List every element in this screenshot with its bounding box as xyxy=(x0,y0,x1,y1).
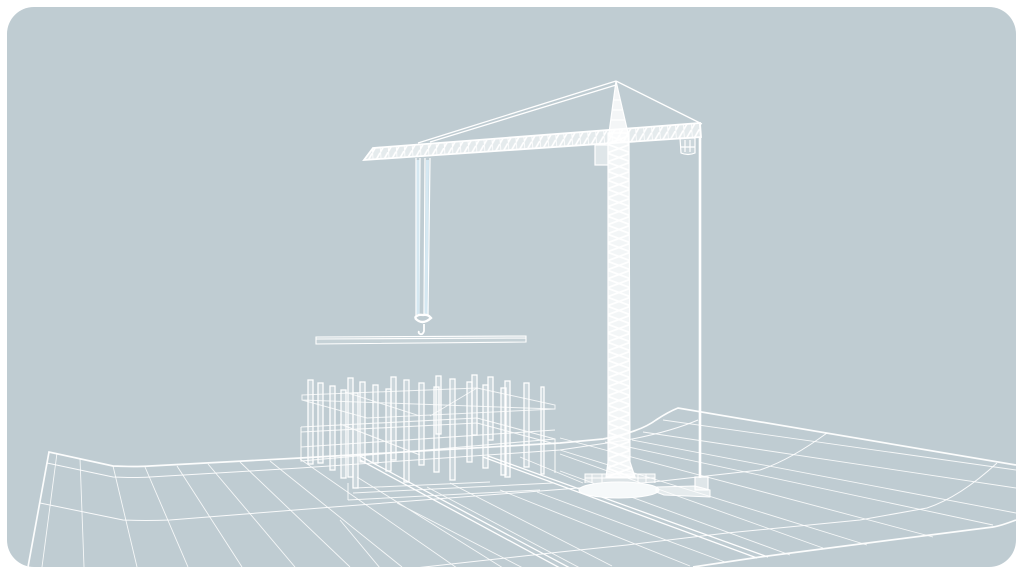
jib boom lattice xyxy=(364,123,701,160)
precast slab on hook xyxy=(316,336,526,344)
building frame under construction xyxy=(301,375,555,488)
hook block xyxy=(415,315,431,322)
road double lines xyxy=(360,456,768,568)
hook xyxy=(419,324,424,334)
right fan lines xyxy=(560,420,1016,555)
operator cab xyxy=(595,145,608,165)
ground wireframe grid xyxy=(28,408,1016,568)
lower floor slab xyxy=(301,418,555,473)
base platform railing xyxy=(585,474,655,483)
tie cables xyxy=(418,81,702,143)
cat head xyxy=(609,81,628,133)
building footing lines xyxy=(348,482,553,500)
columns xyxy=(308,375,544,488)
base disc xyxy=(579,482,659,498)
counterweight arm xyxy=(656,486,710,497)
ground outline xyxy=(28,408,1016,567)
cable blue core xyxy=(418,160,428,314)
upper floor slab xyxy=(302,388,555,418)
hoist cables xyxy=(416,158,430,316)
tower crane xyxy=(364,81,710,498)
hook assembly xyxy=(415,158,431,334)
counterweight box xyxy=(695,477,708,490)
left fan lines xyxy=(42,453,457,568)
cross curves xyxy=(40,420,997,568)
mast xyxy=(606,133,635,477)
mid fan lines xyxy=(357,457,725,568)
right hoist cable xyxy=(699,137,701,478)
counter-jib trolley box xyxy=(680,138,695,154)
